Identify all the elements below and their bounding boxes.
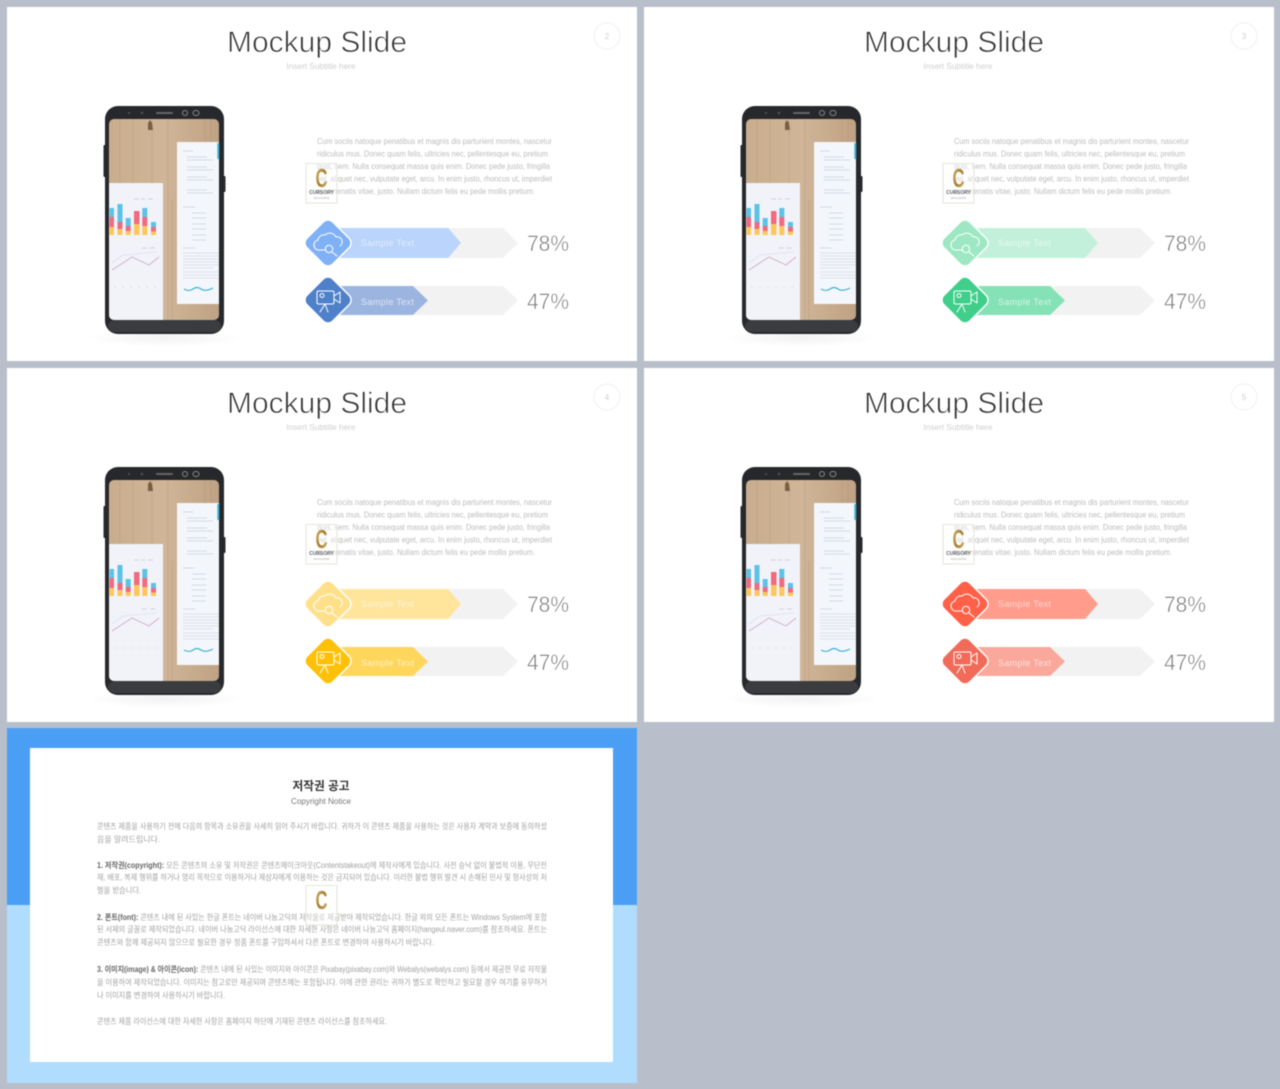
watermark logo: CURSORY	[309, 190, 335, 196]
page number	[594, 384, 620, 410]
bar: 47%	[303, 275, 569, 325]
phone mockup	[722, 106, 882, 347]
title: Mockup Slide	[864, 387, 1044, 420]
bar: 47%: 47%	[527, 289, 569, 314]
page number	[1231, 384, 1257, 410]
notice footer line: 콘텐츠 제품 라이선스에 대한 자세한 사항은 홈페이지 하단에 기재된 콘텐츠 라이선스를 참조하세요.	[97, 1016, 387, 1026]
panel: slide 5 red	[644, 368, 1274, 722]
bar: 47%	[940, 275, 1206, 325]
body text: quis, sem. Nulla consequat massa quis enim. Donec pede justo, fringilla	[954, 523, 1188, 532]
page number: 3	[1242, 32, 1247, 41]
body text: ridiculus mus. Donec quam felis, ultricies nec, pellentesque eu, pretium	[954, 510, 1185, 520]
bar: 47%: 47%	[527, 650, 569, 675]
body text: ridiculus mus. Donec quam felis, ultricies nec, pellentesque eu, pretium	[954, 150, 1185, 158]
notice subtitle: Copyright Notice	[291, 796, 351, 806]
notice section 2	[97, 912, 548, 947]
bar: 47%: Sample Text	[361, 297, 414, 307]
page number: 2	[605, 32, 610, 41]
watermark logo: CURSORY	[309, 551, 335, 557]
notice section 3	[97, 964, 547, 1000]
bar: 47%: 47%	[1164, 650, 1206, 675]
notice section 3: 3. 이미지(image) & 아이콘(icon): 콘텐츠 내에 된 사있는 이미지와 아이콘은 Pixabay(pixabay.com)와 Webalys(webalys.com) 등에서 제공한 무료 저작물	[97, 964, 547, 974]
body text	[317, 498, 553, 557]
subtitle: Insert Subtitle here	[286, 61, 356, 71]
notice section 3: 을 이용하여 제작되었습니다. 이미지는 참고로만 제공되며 콘텐츠에는 포함됩니다. 이에 관한 권리는 귀하가 별도로 확인하고 필요할 경우 여기를 유무하거	[97, 977, 547, 987]
watermark logo: C	[316, 524, 328, 554]
notice section 3: 나 이미지를 변경하여 사용하시기 바랍니다.	[97, 990, 225, 1000]
watermark logo	[306, 524, 337, 564]
watermark logo: C	[952, 163, 965, 193]
watermark logo	[306, 163, 337, 203]
body text: vel, aliquet nec, vulputate eget, arcu. In enim justo, rhoncus ut, imperdiet	[317, 536, 553, 544]
bar: 47%: Sample Text	[998, 297, 1051, 307]
bar: 78%: Sample Text	[998, 599, 1051, 609]
bar: 78%: Sample Text	[361, 238, 414, 248]
bar: 78%: 78%	[527, 592, 569, 617]
bar: 78%: 78%	[527, 231, 569, 256]
page number	[1231, 23, 1257, 49]
notice intro: 음을 알려드립니다.	[97, 834, 160, 844]
body text: a, venenatis vitae, justo. Nullam dictum felis eu pede mollis pretium.	[954, 187, 1172, 196]
body text: a, venenatis vitae, justo. Nullam dictum felis eu pede mollis pretium.	[317, 548, 535, 557]
page number: 5	[1242, 393, 1247, 402]
phone mockup	[722, 467, 882, 708]
watermark logo: MAGAZINE	[951, 196, 966, 200]
notice section 2: 된 서체의 글꼴로 제작되었습니다. 네이버 나눔고딕 라이선스에 대한 자세한 사항은 네이버 나눔고딕 홈페이지(hangeul.naver.com)를 참조하세요. 폰트는	[97, 924, 547, 934]
watermark logo: C	[316, 163, 328, 193]
bar: 47%	[940, 636, 1206, 686]
body text: Cum sociis natoque penatibus et magnis dis parturient montes, nascetur	[954, 137, 1189, 146]
body text: Cum sociis natoque penatibus et magnis dis parturient montes, nascetur	[954, 498, 1189, 507]
bar: 78%: 78%	[1164, 592, 1206, 617]
subtitle: Insert Subtitle here	[286, 422, 356, 432]
title: Mockup Slide	[864, 26, 1044, 59]
bar: 78%: Sample Text	[361, 599, 414, 609]
notice intro	[97, 821, 548, 844]
panel: copyright notice	[7, 728, 637, 1083]
bar: 47%: Sample Text	[361, 658, 414, 668]
bar: 78%	[940, 218, 1206, 268]
body text: Cum sociis natoque penatibus et magnis dis parturient montes, nascetur	[317, 137, 552, 146]
watermark logo: MAGAZINE	[314, 557, 329, 561]
notice section 2: 콘텐츠와 함께 제공되지 않으므로 필요한 경우 정품 폰트를 구입하셔서 다른 폰트로 변경하여 사용하시기 바랍니다.	[97, 937, 434, 947]
body text: vel, aliquet nec, vulputate eget, arcu. In enim justo, rhoncus ut, imperdiet	[954, 174, 1190, 184]
page number: 4	[605, 393, 610, 402]
watermark logo: C	[316, 885, 328, 915]
panel: slide 4 yellow	[7, 368, 637, 722]
body text: quis, sem. Nulla consequat massa quis enim. Donec pede justo, fringilla	[317, 162, 551, 171]
body text: a, venenatis vitae, justo. Nullam dictum felis eu pede mollis pretium.	[317, 187, 535, 196]
title: Mockup Slide	[227, 26, 407, 59]
body text	[317, 137, 553, 196]
bar: 78%: 78%	[1164, 231, 1206, 256]
bar: 47%	[303, 636, 569, 686]
phone mockup	[85, 106, 245, 347]
notice section 1: 1. 저작권(copyright): 모든 콘텐츠의 소유 및 저작권은 콘텐츠메이크아웃(Contentstakeout)에 제작사에게 있습니다. 사전 승낙 없이 불법적 이용, 무단전	[97, 860, 547, 870]
bar: 78%	[940, 579, 1206, 629]
watermark logo: CURSORY	[946, 190, 972, 196]
panel: slide 2 blue	[7, 7, 637, 361]
notice section 1	[97, 860, 547, 895]
notice title: 저작권 공고	[292, 778, 350, 793]
body text: quis, sem. Nulla consequat massa quis enim. Donec pede justo, fringilla	[317, 523, 551, 532]
panel: slide 3 green	[644, 7, 1274, 361]
notice section 1: 재, 배포, 복제 행위를 하거나 영리 목적으로 이용하거나 제삼자에게 이용하는 것은 금지되어 있습니다. 이러한 불법 행위 발견 시 손해된 민사 및 형사상의 처	[97, 872, 547, 882]
watermark logo	[943, 163, 974, 203]
bar: 47%: Sample Text	[998, 658, 1051, 668]
body text: quis, sem. Nulla consequat massa quis enim. Donec pede justo, fringilla	[954, 162, 1188, 171]
body text: ridiculus mus. Donec quam felis, ultricies nec, pellentesque eu, pretium	[317, 510, 548, 520]
watermark logo: C	[952, 524, 965, 554]
body text: vel, aliquet nec, vulputate eget, arcu. In enim justo, rhoncus ut, imperdiet	[954, 536, 1190, 544]
notice intro: 콘텐츠 제품을 사용하기 전에 다음의 항목과 소유권을 사세히 읽어 주시기 바랍니다. 귀하가 이 콘텐츠 제품을 사용하는 것은 사용자 계약과 보증에 동의하셨	[97, 821, 548, 831]
phone mockup	[85, 467, 245, 708]
watermark logo	[306, 885, 337, 925]
body text	[954, 137, 1190, 196]
bar: 47%: 47%	[1164, 289, 1206, 314]
subtitle: Insert Subtitle here	[924, 61, 993, 71]
watermark logo: CURSORY	[946, 551, 972, 557]
body text	[954, 498, 1190, 557]
body text: ridiculus mus. Donec quam felis, ultricies nec, pellentesque eu, pretium	[317, 150, 548, 158]
notice section 2: 2. 폰트(font): 콘텐츠 내에 된 사있는 한글 폰트는 네이버 나눔고딕의 저작물로 제공받아 제작되었습니다. 한글 외의 모든 폰트는 Windows System에 포함	[97, 912, 548, 922]
body text: a, venenatis vitae, justo. Nullam dictum felis eu pede mollis pretium.	[954, 548, 1172, 557]
bar: 78%	[303, 579, 569, 629]
body text: vel, aliquet nec, vulputate eget, arcu. In enim justo, rhoncus ut, imperdiet	[317, 174, 553, 184]
subtitle: Insert Subtitle here	[924, 422, 993, 432]
bar: 78%	[303, 218, 569, 268]
watermark logo: MAGAZINE	[951, 557, 966, 561]
page number	[594, 23, 620, 49]
watermark logo: MAGAZINE	[314, 196, 329, 200]
notice section 1: 벌을 받습니다.	[97, 885, 141, 895]
title: Mockup Slide	[227, 387, 407, 420]
watermark logo	[943, 524, 974, 564]
bar: 78%: Sample Text	[998, 238, 1051, 248]
body text: Cum sociis natoque penatibus et magnis dis parturient montes, nascetur	[317, 498, 552, 507]
